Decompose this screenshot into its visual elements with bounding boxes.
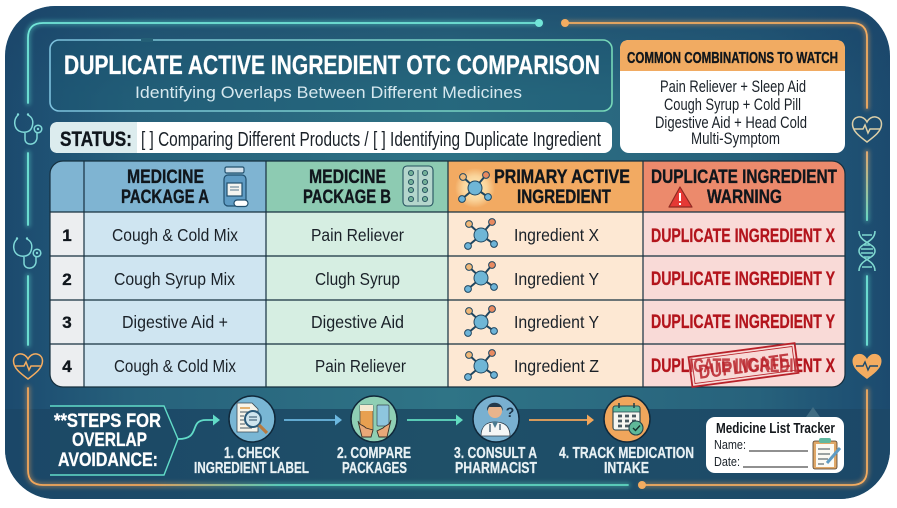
panel: common combinations: Pain Reliever + Sleep Aid: [660, 78, 806, 96]
row 2: Ingredient Y: [514, 269, 599, 289]
icon: warning triangle: [669, 187, 692, 207]
row 4: [62, 343, 835, 387]
step 1: INGREDIENT LABEL: [194, 460, 309, 477]
step 4: [559, 396, 694, 477]
header: package B: PACKAGE B: [303, 187, 391, 208]
row 4: 4: [62, 357, 72, 376]
row 4: Pain Reliever: [315, 356, 406, 376]
row 3: Digestive Aid +: [122, 312, 228, 332]
header: primary active ingredient: [455, 167, 630, 208]
step 1: [194, 396, 309, 477]
panel: common combinations: [620, 40, 845, 153]
steps label: [50, 406, 178, 475]
arrow: step 1 to 2: [284, 414, 342, 426]
status bar: [50, 122, 612, 153]
row 3: [62, 306, 835, 336]
row 1: 1: [62, 226, 72, 245]
stamp: [688, 343, 799, 387]
status bar: STATUS:: [60, 128, 132, 151]
step 3: ?: [506, 404, 514, 420]
header: duplicate warning: DUPLICATE INGREDIENT: [651, 167, 837, 188]
step 2: [337, 396, 411, 477]
icon: dna: [859, 231, 875, 271]
icon: clipboard: [813, 438, 840, 469]
row 2: 2: [62, 270, 72, 289]
panel: common combinations: Cough Syrup + Cold Pill: [664, 96, 801, 114]
panel: medicine list tracker: Date:: [714, 454, 740, 469]
row 3: Ingredient Y: [514, 312, 599, 332]
header: duplicate warning: [651, 167, 837, 208]
steps label: AVOIDANCE:: [58, 450, 158, 471]
panel: common combinations: Digestive Aid + Head Cold: [655, 114, 807, 132]
panel: common combinations: Multi-Symptom: [691, 130, 780, 148]
icon: heart top right: [852, 117, 882, 142]
row 3: Digestive Aid: [311, 312, 404, 332]
panel: medicine list tracker: Medicine List Tracker: [716, 420, 835, 437]
step 2: PACKAGES: [342, 460, 407, 477]
row 1: Ingredient X: [514, 225, 599, 245]
row 1: Cough & Cold Mix: [112, 225, 238, 245]
arrow: label to step 1: [178, 414, 220, 439]
panel: medicine list tracker: [706, 407, 844, 473]
header: primary active ingredient: PRIMARY ACTIVE: [494, 167, 630, 188]
heading: DUPLICATE ACTIVE INGREDIENT OTC COMPARISON: [64, 50, 600, 80]
steps label: OVERLAP: [72, 430, 147, 451]
header: package A: [121, 167, 248, 208]
status bar: [ ] Comparing Different Products / [ ] Identifying Duplicate Ingredient: [141, 129, 601, 151]
row 2: [62, 262, 835, 292]
header: package A: PACKAGE A: [121, 187, 209, 208]
comparison table: [50, 161, 845, 387]
arrow: step 2 to 3: [407, 414, 463, 426]
icon: stethoscope top: [15, 113, 42, 144]
step 1: 1. CHECK: [224, 445, 281, 462]
row 2: Clugh Syrup: [315, 269, 400, 289]
title panel: [50, 38, 612, 111]
step 3: PHARMACIST: [455, 460, 537, 477]
header: primary active ingredient: INGREDIENT: [517, 187, 611, 208]
step 2: 2. COMPARE: [337, 445, 411, 462]
row 3: 3: [62, 313, 72, 332]
row 4: Ingredient Z: [514, 356, 599, 376]
row 1: [62, 219, 835, 249]
icon: heart left: [14, 354, 42, 379]
icon: pill bottle: [224, 167, 248, 206]
icon: heart orange right: [852, 354, 882, 379]
stamp: DUPLICATE: [697, 350, 791, 384]
arrow: step 3 to 4: [529, 414, 594, 426]
step 3: 3. CONSULT A: [454, 445, 537, 462]
row 4: Cough & Cold Mix: [114, 356, 236, 376]
steps label: **STEPS FOR: [54, 411, 161, 432]
step 4: INTAKE: [604, 460, 649, 477]
step 4: 4. TRACK MEDICATION: [559, 445, 694, 462]
row 1: Pain Reliever: [311, 225, 404, 245]
subtitle: Identifying Overlaps Between Different Medicines: [135, 83, 522, 102]
header: duplicate warning: WARNING: [707, 187, 782, 208]
header: package A: MEDICINE: [127, 167, 204, 188]
icon: blister pack: [403, 166, 433, 206]
panel: medicine list tracker: Name:: [714, 437, 746, 452]
header: package B: MEDICINE: [309, 167, 386, 188]
row 2: Cough Syrup Mix: [114, 269, 235, 289]
icon: stethoscope middle: [14, 237, 41, 268]
header: package B: [303, 166, 433, 208]
step 3: [454, 396, 537, 477]
